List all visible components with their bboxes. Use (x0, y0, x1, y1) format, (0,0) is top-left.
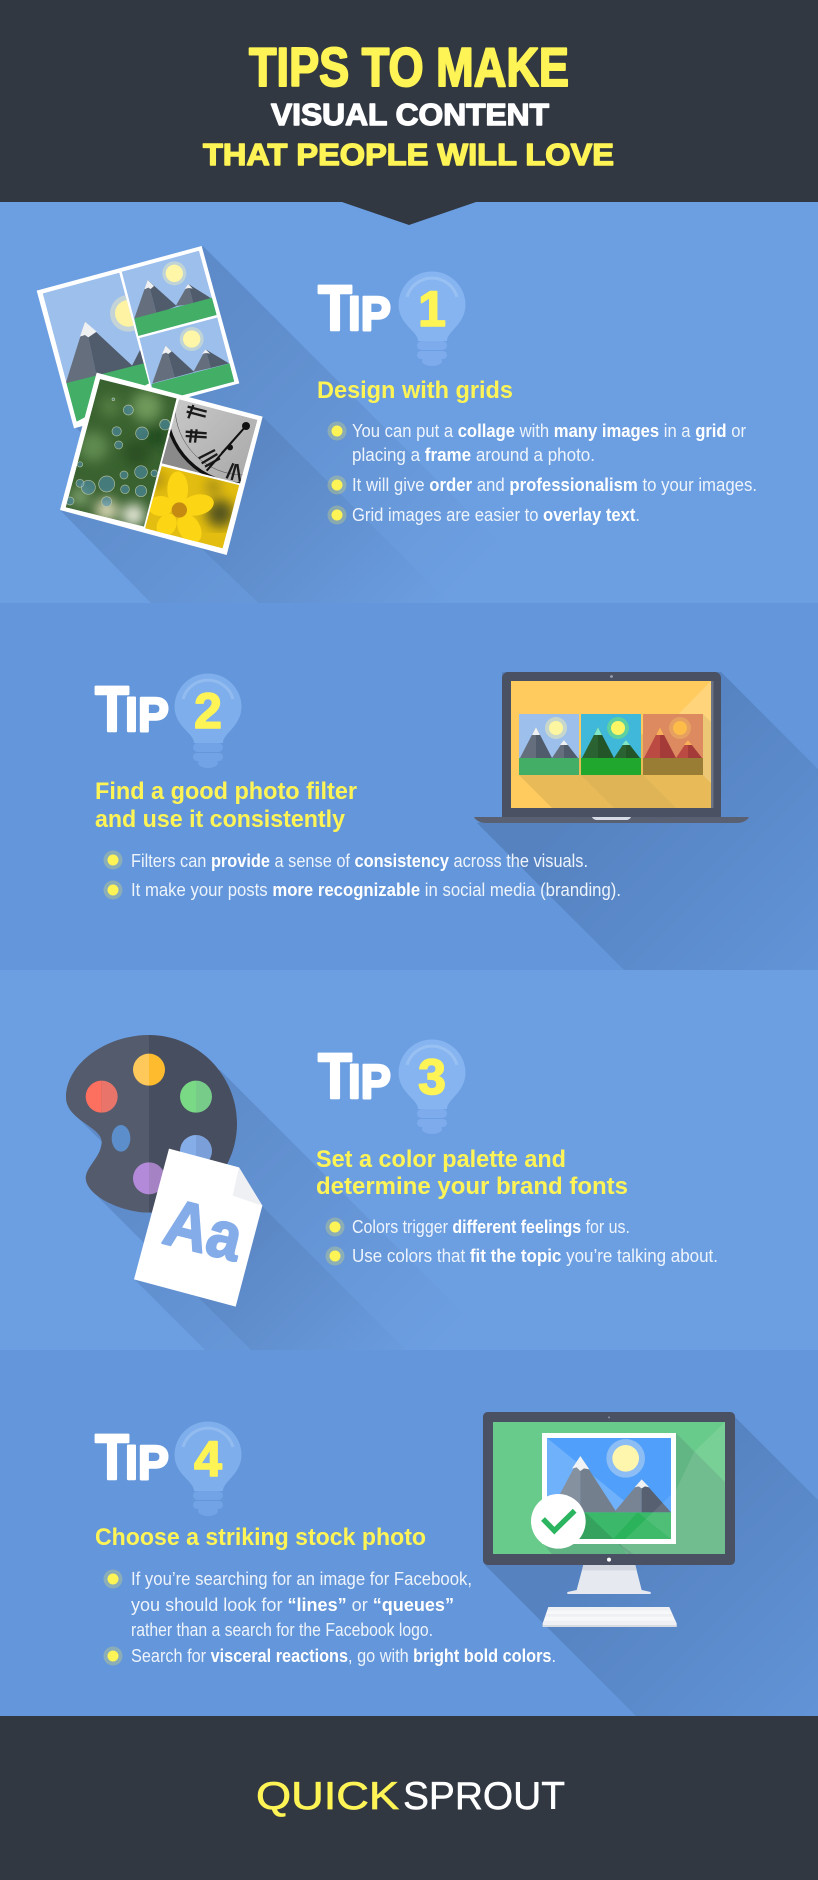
icon: light bulb 1: 1 (418, 281, 446, 337)
tip 1 label: T (318, 272, 352, 344)
keyboard (543, 1607, 677, 1627)
icon: light bulb 3: 3 (418, 1049, 446, 1105)
check badge (531, 1494, 586, 1549)
photo: teal filter (581, 714, 641, 775)
stock photo (542, 1433, 676, 1544)
long shadow: laptop (477, 672, 818, 970)
icon: light bulb 2 (174, 674, 242, 768)
panel: tip 4 (0, 1350, 818, 1716)
tip 4 label: T (95, 1421, 129, 1493)
font page: Aa (157, 1185, 251, 1276)
tip 1 label: IP (348, 288, 391, 341)
heading: tip 3 (316, 1146, 628, 1200)
long shadow: palette and page (79, 1070, 394, 1350)
footer (0, 1716, 818, 1880)
bullet list: tip 1: You can put a collage with many images in a grid or (352, 421, 746, 441)
heading: tip 2: Find a good photo filter (95, 778, 357, 805)
heading: tip 2 (95, 778, 357, 833)
heading: tip 3: determine your brand fonts (316, 1173, 628, 1200)
bullet list: tip 1 (328, 421, 757, 525)
heading: tip 1: Design with grids (317, 377, 513, 404)
icon: light bulb 1 (398, 272, 466, 366)
title (203, 36, 614, 172)
tip 2 label: T (95, 673, 129, 745)
title: THAT PEOPLE WILL LOVE (203, 137, 614, 172)
header banner (0, 0, 818, 202)
bullet list: tip 3 (326, 1217, 718, 1266)
photo: natural filter (519, 714, 579, 775)
icon: light bulb 4: 4 (194, 1431, 222, 1487)
icon: photo grid collage (36, 246, 263, 555)
logo: Quick Sprout (256, 1775, 565, 1818)
bullet list: tip 4 (104, 1569, 556, 1666)
tip 4 label: IP (125, 1437, 169, 1490)
tip 4 label (95, 1421, 242, 1516)
photo: clock (162, 400, 258, 484)
logo: Quick Sprout: SPROUT (403, 1775, 565, 1818)
photo grid frame (60, 372, 263, 555)
bullet list: tip 2: It make your posts more recognizable in social media (branding). (131, 880, 621, 900)
icon: desktop monitor with stock photo (483, 1412, 735, 1627)
tip 3 label: T (318, 1040, 352, 1112)
bullet list: tip 4: rather than a search for the Facebook logo. (131, 1620, 433, 1640)
bullet list: tip 2 (104, 850, 621, 900)
tip 3 label: IP (348, 1056, 391, 1109)
paint palette (66, 1035, 237, 1212)
bullet list: tip 4: If you’re searching for an image for Facebook, (131, 1569, 472, 1589)
bullet list: tip 1: It will give order and professionalism to your images. (352, 475, 757, 495)
arrow: header pointer (339, 201, 479, 225)
icon: light bulb 2: 2 (194, 683, 222, 739)
heading: tip 3: Set a color palette and (316, 1146, 566, 1173)
tip 2 label (95, 673, 242, 768)
heading: tip 2: and use it consistently (95, 806, 346, 833)
title: TIPS TO MAKE (249, 36, 569, 98)
logo: Quick Sprout: QUICK (256, 1775, 399, 1818)
tip 3 label (318, 1040, 466, 1134)
monitor screen (493, 1422, 725, 1554)
long shadow: monitor (485, 1417, 818, 1716)
bullet list: tip 3: Colors trigger different feelings for us. (352, 1217, 630, 1237)
photo: soap bubbles (66, 379, 177, 527)
bullet list: tip 1: Grid images are easier to overlay text. (352, 505, 640, 525)
bullet list: tip 3: Use colors that fit the topic you’re talking about. (352, 1246, 718, 1266)
photo: yellow flower (145, 466, 239, 548)
bullet list: tip 1: placing a frame around a photo. (352, 445, 595, 465)
panel: tip 3 (0, 970, 818, 1390)
panel: tip 2 (0, 603, 818, 970)
title: VISUAL CONTENT (271, 97, 549, 132)
icon: laptop with filtered photos (474, 672, 749, 823)
icon: light bulb 3 (398, 1040, 466, 1134)
long shadow: collage (60, 246, 420, 603)
icon: paint palette and font page (60, 1030, 262, 1307)
monitor stand (567, 1565, 651, 1594)
photo: warm filter (643, 714, 703, 775)
icon: light bulb 4 (174, 1422, 242, 1516)
bullet list: tip 4: Search for visceral reactions, go with bright bold colors. (131, 1646, 556, 1666)
heading: tip 4: Choose a striking stock photo (95, 1524, 426, 1551)
monitor frame (483, 1412, 735, 1565)
landscape grid frame (37, 246, 239, 428)
bullet list: tip 2: Filters can provide a sense of consistency across the visuals. (131, 851, 588, 871)
tip 1 label (318, 272, 466, 366)
bullet list: tip 4: you should look for “lines” or “queues” (131, 1595, 454, 1615)
panel: tip 1 (0, 201, 818, 643)
tip 2 label: IP (125, 689, 169, 742)
font page (134, 1149, 262, 1307)
